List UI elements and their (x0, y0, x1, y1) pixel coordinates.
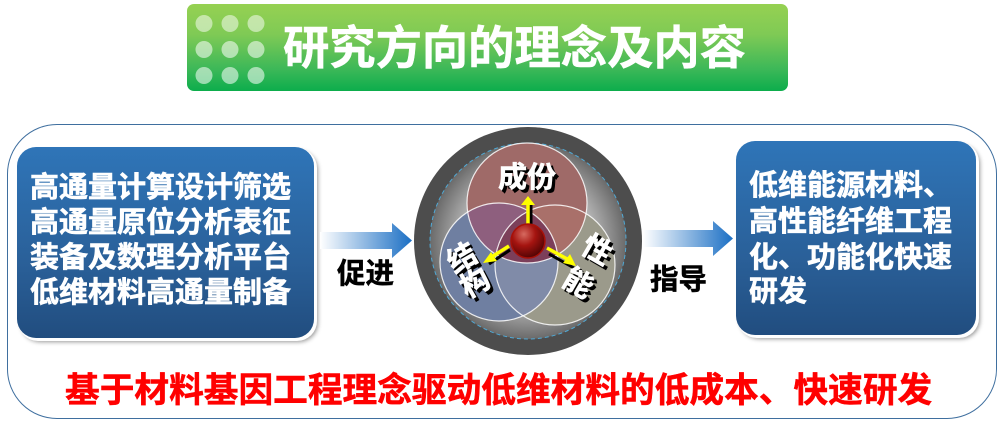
arrow: left to centre (320, 223, 412, 258)
label: structure: 构 (454, 262, 496, 305)
right box text: 高性能纤维工程 (749, 206, 952, 238)
label: structure (441, 237, 499, 308)
right box text: 化、功能化快速 (749, 242, 952, 274)
label: structure: 结 (441, 237, 483, 280)
circle: composition (467, 143, 587, 263)
left box text: 高通量原位分析表征 (30, 207, 291, 239)
icon: red sphere (511, 224, 545, 258)
label: composition: 成份 (498, 161, 556, 194)
label: property: 性 (576, 229, 618, 272)
left box text: 高通量计算设计筛选 (30, 172, 291, 204)
arrows: three directions (483, 196, 576, 268)
panel: left methods box (17, 147, 314, 338)
label: property: 性 (579, 232, 621, 275)
main panel outline (7, 124, 997, 419)
diagram: composition structure property circles (414, 127, 642, 355)
label: structure: 结 (444, 240, 486, 283)
right box text: 研发 (749, 276, 807, 308)
label: structure: 构 (457, 265, 499, 308)
circle: property (495, 205, 615, 325)
icon: dot grid (196, 15, 264, 84)
left box text: 低维材料高通量制备 (30, 277, 291, 309)
circle: structure (440, 203, 558, 321)
label: promote: 促进 (337, 258, 394, 290)
title text: 研究方向的理念及内容 (283, 22, 746, 74)
label: property (557, 229, 621, 308)
right box text: 低维能源材料、 (749, 170, 952, 202)
panel: right goal box (736, 141, 976, 335)
arrow: centre to right (646, 221, 733, 256)
left box text (30, 172, 292, 309)
label: composition: 成份 (501, 164, 559, 197)
overlaps between circles (440, 143, 615, 325)
bottom conclusion text: 基于材料基因工程理念驱动低维材料的低成本、快速研发 (65, 372, 932, 410)
title banner (187, 4, 788, 91)
right box text (749, 170, 952, 308)
label: guide: 指导 (650, 264, 707, 296)
label: property: 能 (560, 265, 602, 308)
left box text: 装备及数理分析平台 (30, 242, 291, 274)
label: property: 能 (557, 262, 599, 305)
